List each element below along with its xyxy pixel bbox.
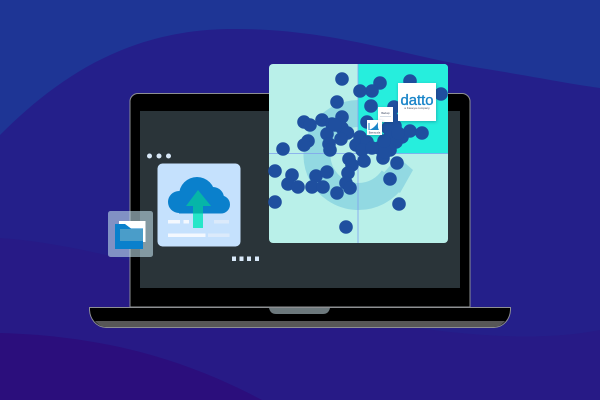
pagination squares xyxy=(232,256,259,261)
small logo card: backup: Backup xyxy=(381,112,390,115)
small logo card: barracuda xyxy=(367,120,382,135)
menu dots xyxy=(147,154,171,158)
icon: cloud xyxy=(168,177,230,214)
circular arrow watermark xyxy=(317,114,413,196)
datto logo card: datto xyxy=(400,93,434,109)
laptop screen xyxy=(140,111,460,288)
laptop xyxy=(90,93,510,328)
datto logo card xyxy=(398,83,436,121)
chart: quadrant scatter plot xyxy=(268,64,448,243)
datto logo card: a Kaseya company xyxy=(404,106,430,110)
leader quadrant xyxy=(358,64,448,154)
icon: upload arrow xyxy=(186,190,211,228)
small logo card: backup xyxy=(378,107,393,122)
data points xyxy=(268,72,448,234)
panel: folder tile xyxy=(108,211,153,257)
text placeholder lines xyxy=(168,220,230,237)
laptop lid xyxy=(130,93,470,307)
chart background xyxy=(269,64,448,243)
small logo card: barracuda: Barracuda xyxy=(369,132,381,134)
icon: folder xyxy=(115,221,146,249)
panel: cloud upload card xyxy=(158,164,240,246)
laptop base xyxy=(90,308,510,328)
